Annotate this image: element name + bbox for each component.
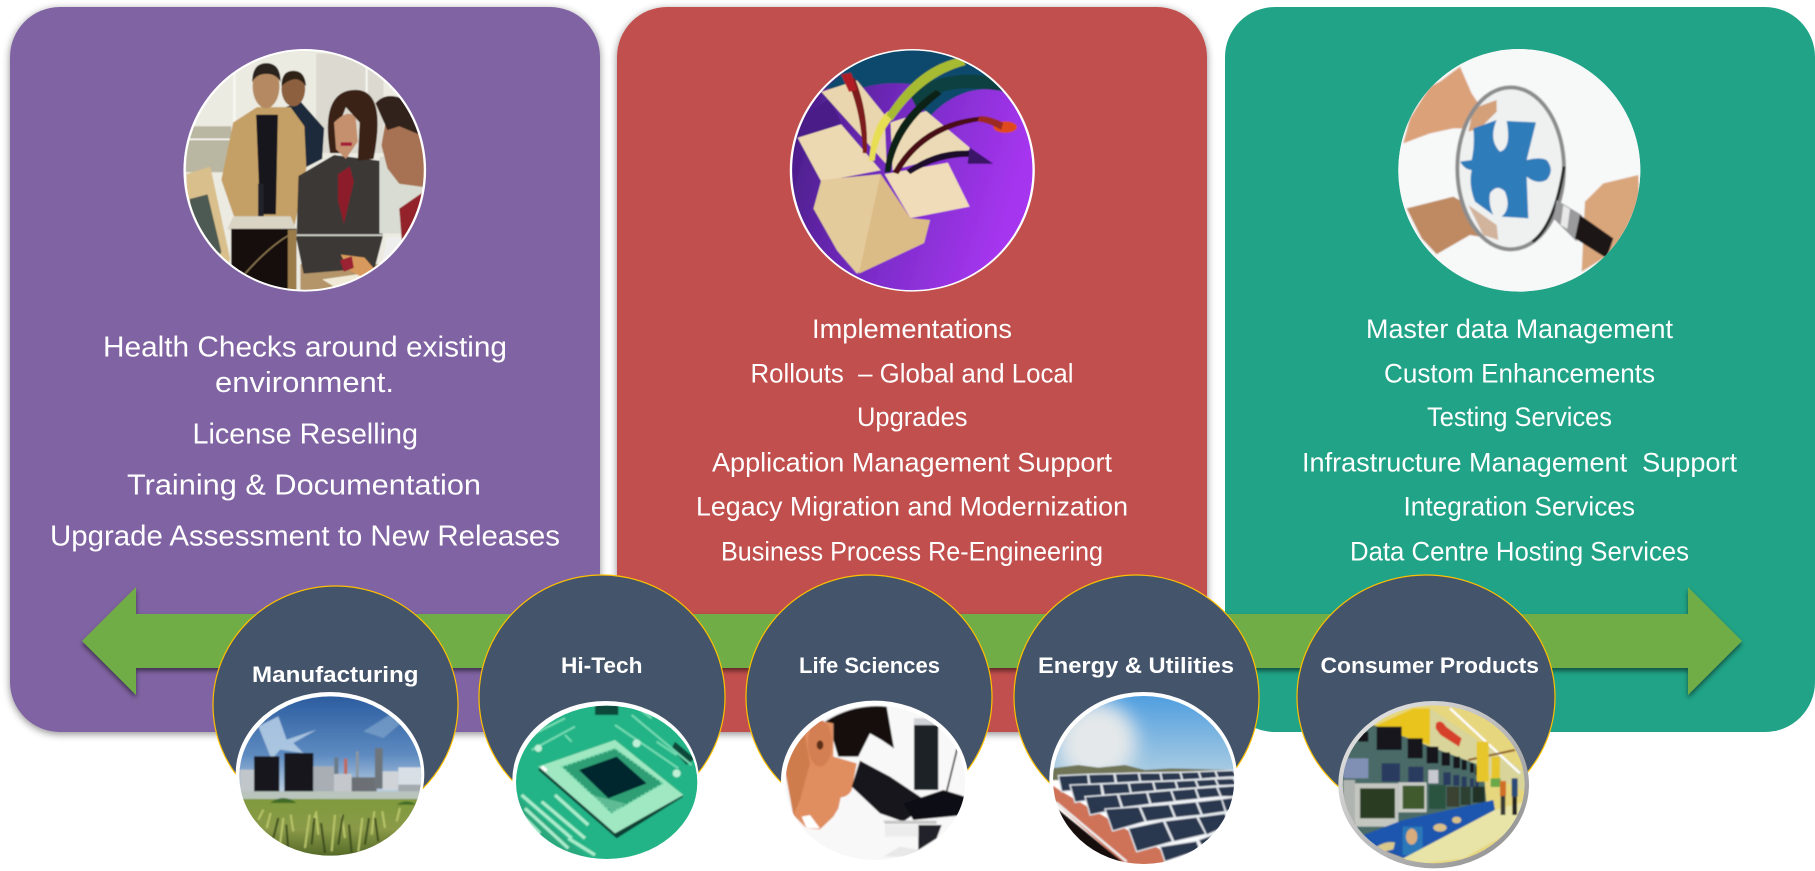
text block: delivery services list: Legacy Migration and Modernization	[696, 492, 1128, 522]
photo: office team at a desk	[182, 48, 431, 297]
text block: delivery services list: Upgrades	[857, 402, 968, 432]
text block: support services list	[50, 332, 560, 552]
text block: delivery services list	[696, 314, 1128, 566]
text block: delivery services list: Rollouts – Global and Local	[750, 358, 1074, 388]
text block: delivery services list: Business Process Re-Engineering	[721, 536, 1103, 566]
text block: delivery services list: Application Management Support	[712, 448, 1113, 478]
badge: Life Sciences	[746, 575, 992, 863]
photo: scientist at microscope	[780, 700, 970, 863]
label: Manufacturing: Manufacturing	[252, 662, 418, 687]
photo: magnifying glass over a puzzle piece	[1397, 48, 1643, 293]
text block: enhancement services list: Infrastructure Management Support	[1302, 448, 1738, 478]
label: Energy & Utilities: Energy & Utilities	[1038, 653, 1234, 678]
photo: refinery and grass	[236, 692, 425, 859]
text block: support services list: Training & Documentation	[127, 470, 481, 502]
badge: Energy & Utilities	[1014, 575, 1259, 867]
panel: support services (purple)	[10, 7, 600, 732]
label: Hi-Tech: Hi-Tech	[561, 653, 642, 678]
text block: enhancement services list: Master data Management	[1366, 314, 1674, 344]
label: Life Sciences: Life Sciences	[799, 653, 940, 678]
text block: enhancement services list: Integration Services	[1404, 492, 1635, 522]
badge: Consumer Products	[1297, 575, 1555, 868]
badge: Hi-Tech	[479, 575, 725, 862]
photo: electronics store aisle	[1338, 701, 1529, 868]
photo: green circuit board chip	[512, 701, 702, 862]
text block: support services list: Health Checks around existing	[103, 332, 507, 364]
text block: enhancement services list: Testing Services	[1427, 402, 1612, 432]
text block: support services list: Upgrade Assessment to New Releases	[50, 520, 560, 552]
text block: delivery services list: Implementations	[812, 314, 1012, 344]
text block: enhancement services list: Data Centre Hosting Services	[1350, 536, 1689, 566]
photo: rooftop solar panels	[1049, 692, 1237, 867]
arrow: double-headed green arrow	[82, 587, 1742, 695]
panel: enhancement services (teal)	[1225, 7, 1815, 732]
panel: delivery services (red)	[617, 7, 1207, 732]
text block: enhancement services list: Custom Enhancements	[1384, 358, 1655, 388]
photo: open box with coloured arrows	[790, 46, 1035, 293]
text block: enhancement services list	[1302, 314, 1738, 566]
label: Consumer Products: Consumer Products	[1320, 653, 1539, 678]
badge: Manufacturing	[213, 586, 458, 859]
text block: support services list: environment.	[215, 367, 394, 399]
text block: support services list: License Reselling	[192, 418, 418, 450]
